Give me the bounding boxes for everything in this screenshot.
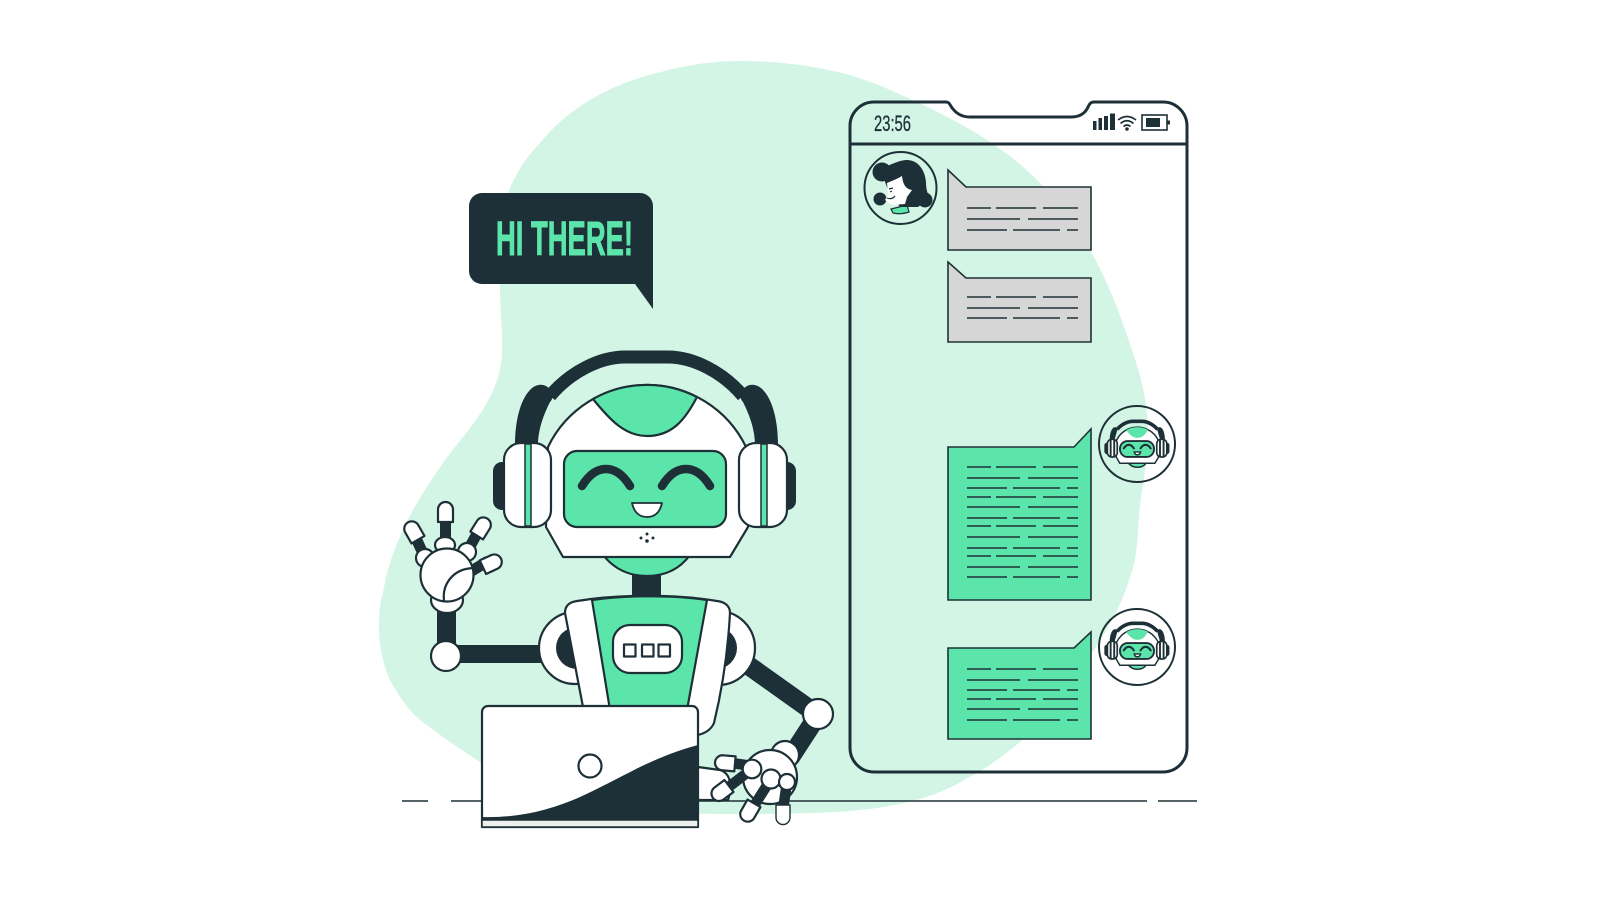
green message bubble 2 <box>948 632 1091 739</box>
head <box>546 385 748 557</box>
avatar: woman <box>864 152 936 224</box>
right hand on keyboard <box>698 741 799 824</box>
left hand <box>402 502 504 613</box>
torso <box>565 596 730 735</box>
chin <box>603 555 690 576</box>
icon: signal bars <box>1093 114 1115 130</box>
right ear cup <box>739 443 787 527</box>
speaker dots <box>640 532 654 543</box>
icon: battery <box>1142 115 1170 130</box>
green message bubble 1 <box>948 429 1091 600</box>
robot left arm <box>402 502 545 671</box>
robot right arm <box>745 663 833 758</box>
laptop <box>482 706 698 827</box>
icon: wifi <box>1118 116 1136 131</box>
avatar: robot 1 <box>1099 406 1175 482</box>
robot <box>402 357 833 827</box>
left ear cup <box>504 443 551 527</box>
ground line <box>402 800 1197 802</box>
phone frame <box>850 102 1187 772</box>
gray message bubble 2 <box>948 262 1091 342</box>
clock: 23:56 <box>874 111 911 136</box>
chest panel <box>613 625 682 673</box>
visor face <box>564 451 726 527</box>
headphones band <box>493 357 796 510</box>
neck <box>632 570 661 600</box>
background blob <box>379 61 1148 814</box>
gray message bubble 1 <box>948 170 1091 250</box>
avatar: robot 2 <box>1099 609 1175 685</box>
shoulders <box>539 611 755 685</box>
speech bubble: hi there <box>469 193 653 309</box>
header divider <box>850 142 1187 146</box>
bubble text: HI THERE! <box>496 213 633 266</box>
head dome <box>593 385 697 436</box>
phone <box>850 102 1187 772</box>
